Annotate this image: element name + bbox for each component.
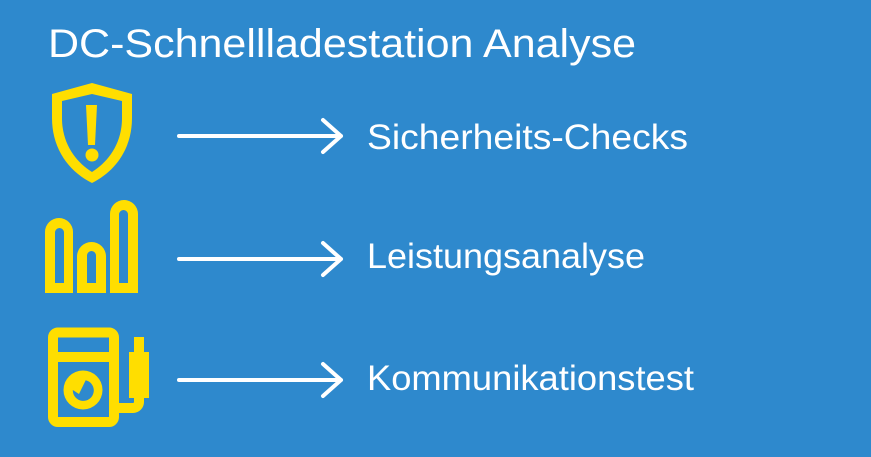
- icon: bar chart: [45, 200, 138, 293]
- label: performance analysis: Leistungsanalyse: [367, 237, 645, 276]
- title: DC-Schnellladestation Analyse: [48, 22, 636, 66]
- label: communication test: Kommunikationstest: [367, 359, 694, 398]
- arrow: communication test: [179, 364, 341, 396]
- label: safety checks: Sicherheits-Checks: [367, 118, 688, 157]
- arrow: performance analysis: [179, 243, 341, 275]
- arrow: safety checks: [179, 120, 341, 152]
- icon: shield with exclamation mark: [52, 83, 132, 183]
- icon: multimeter: [53, 332, 149, 422]
